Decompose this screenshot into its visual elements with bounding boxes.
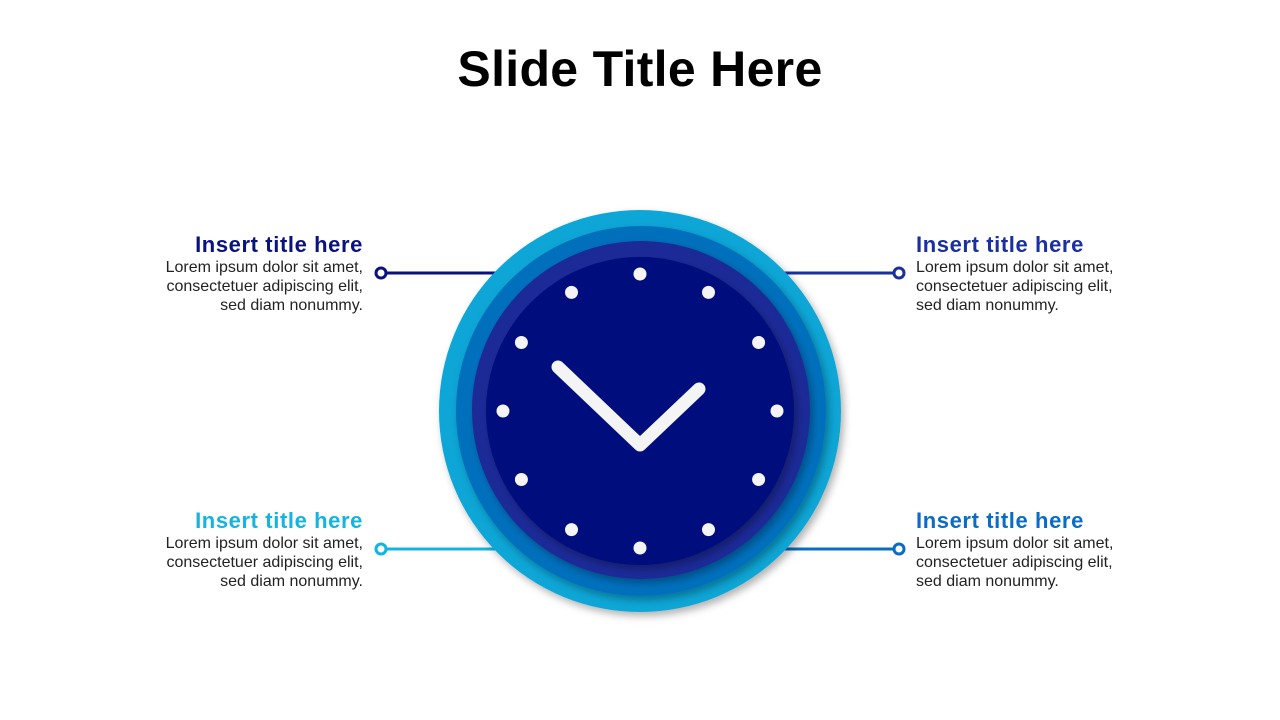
text block: bottom right: Lorem ipsum dolor sit amet, xyxy=(916,535,1113,552)
connector: top right xyxy=(778,268,904,278)
connector: top left xyxy=(376,268,502,278)
connector: bottom left xyxy=(376,544,502,554)
text block: top left: consectetuer adipiscing elit, xyxy=(166,278,363,295)
text block: top right xyxy=(916,232,1113,314)
text block: top right: Insert title here xyxy=(916,232,1084,257)
text block: top left xyxy=(166,232,363,314)
title: Slide Title Here xyxy=(457,41,823,97)
text block: top left: Lorem ipsum dolor sit amet, xyxy=(166,259,363,276)
text block: top right: sed diam nonummy. xyxy=(916,297,1059,314)
text block: bottom left: consectetuer adipiscing elit, xyxy=(166,554,363,571)
text block: top left: sed diam nonummy. xyxy=(220,297,363,314)
text block: bottom left: Insert title here xyxy=(195,508,363,533)
clock hands xyxy=(558,367,699,445)
text block: top right: Lorem ipsum dolor sit amet, xyxy=(916,259,1113,276)
connector: bottom right xyxy=(778,544,904,554)
text block: top right: consectetuer adipiscing elit, xyxy=(916,278,1113,295)
text block: bottom right xyxy=(916,508,1113,590)
text block: bottom right: Insert title here xyxy=(916,508,1084,533)
text block: bottom right: consectetuer adipiscing elit, xyxy=(916,554,1113,571)
text block: bottom right: sed diam nonummy. xyxy=(916,573,1059,590)
text block: top left: Insert title here xyxy=(195,232,363,257)
text block: bottom left: sed diam nonummy. xyxy=(220,573,363,590)
text block: bottom left: Lorem ipsum dolor sit amet, xyxy=(166,535,363,552)
text block: bottom left xyxy=(166,508,363,590)
clock xyxy=(439,210,841,612)
clock dots xyxy=(496,268,784,554)
